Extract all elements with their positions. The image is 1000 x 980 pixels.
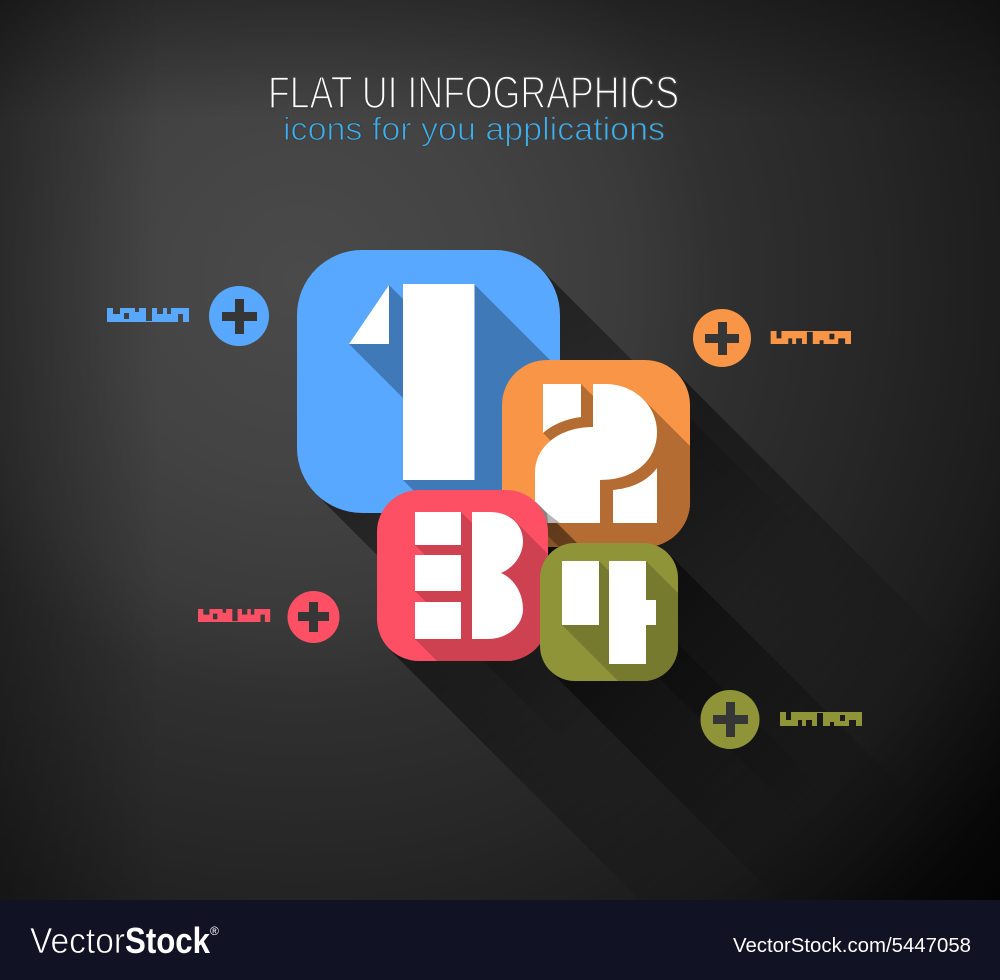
label placeholder orange bbox=[771, 331, 851, 344]
number 4 bbox=[562, 561, 656, 664]
icon: plus blue bbox=[209, 286, 269, 346]
title: FLAT UI INFOGRAPHICS bbox=[268, 67, 679, 118]
subtitle: icons for you applications bbox=[283, 111, 665, 147]
label placeholder olive bbox=[780, 712, 862, 726]
card 4 background bbox=[540, 543, 678, 681]
number 4 shadow bbox=[562, 561, 678, 681]
callout: orange bbox=[693, 309, 851, 367]
number 1 shadow bbox=[349, 284, 550, 490]
callout: red bbox=[198, 591, 340, 643]
card 3 background bbox=[377, 490, 548, 661]
long shadow: card 3 bbox=[389, 502, 816, 929]
long shadow: card 4 bbox=[550, 553, 928, 931]
panel: card 3 red bbox=[377, 490, 548, 661]
card 1 background bbox=[297, 250, 560, 513]
long shadow: card 1 bbox=[316, 269, 861, 814]
icon: plus red bbox=[288, 591, 340, 643]
callout: olive bbox=[700, 690, 862, 749]
light corner between cards bbox=[547, 513, 560, 523]
card 2 background bbox=[502, 360, 690, 547]
panel: card 4 olive bbox=[540, 543, 780, 779]
panel: card 1 blue bbox=[297, 250, 632, 555]
footer image id: VectorStock.com/5447058 bbox=[733, 935, 971, 957]
number 1 bbox=[349, 284, 474, 480]
label placeholder red bbox=[198, 609, 270, 622]
long shadow: card 2 bbox=[515, 373, 957, 814]
footer logo: ® bbox=[210, 924, 219, 938]
number 3 bbox=[415, 512, 523, 639]
icon: plus olive bbox=[700, 690, 760, 749]
footer logo: VectorStock bbox=[30, 920, 223, 961]
number 2 bbox=[535, 384, 657, 523]
icon: plus orange bbox=[693, 309, 751, 367]
panel: card 2 orange bbox=[502, 360, 833, 628]
number 3 shadow bbox=[415, 512, 548, 661]
callout: blue bbox=[107, 286, 269, 346]
number 2 shadow bbox=[543, 384, 690, 547]
footer bar bbox=[0, 900, 1000, 980]
label placeholder blue bbox=[107, 308, 189, 322]
